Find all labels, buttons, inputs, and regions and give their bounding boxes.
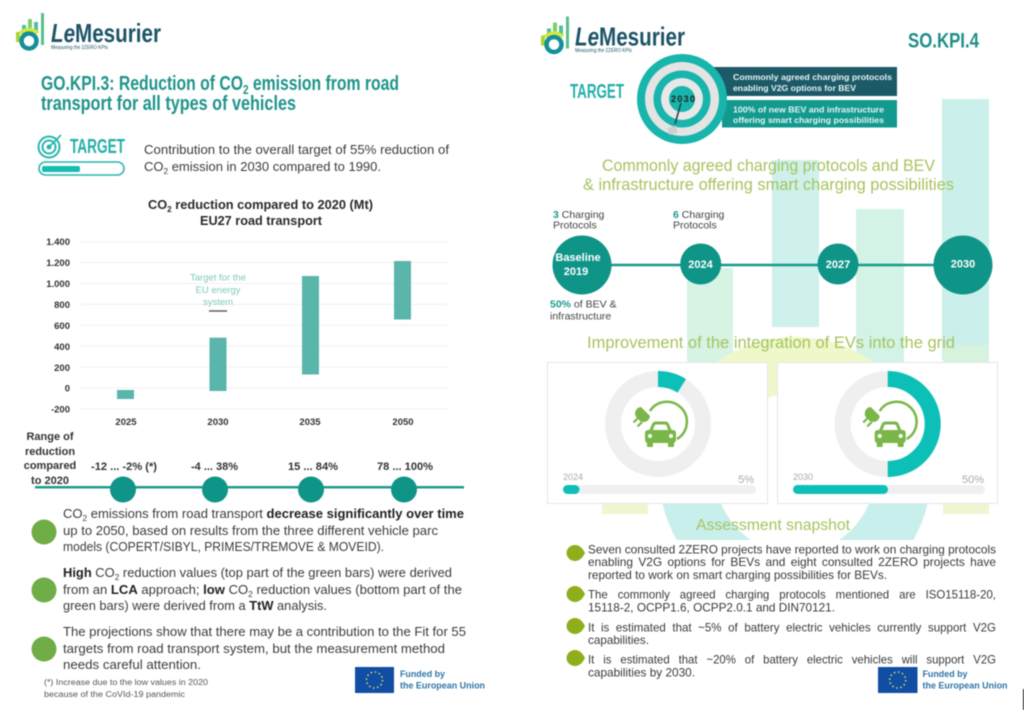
bullet: 5 percent V2G: [566, 618, 996, 647]
target description: CO: [144, 160, 163, 174]
timeline: 2024: [688, 259, 714, 271]
bullet: decrease over time: models (COPERT/SIBYL, PRIMES/TREMOVE & MOVEID).: [63, 540, 384, 554]
bullet: 5 percent V2G: It is estimated that ~5% of battery electric vehicles currently support V2G: [588, 620, 996, 634]
range of reduction timeline: -12 ... -2% (*): [91, 461, 157, 473]
milestone: 3 charging protocols: 3 Charging: [553, 209, 605, 221]
bullet: projections: [32, 625, 466, 672]
EU funding logo right: the European Union: [922, 680, 1008, 690]
heading: SO.KPI.4: SO.KPI.4: [908, 30, 979, 52]
timeline: 2027: [826, 259, 850, 271]
range of reduction timeline: [24, 431, 464, 502]
heading: charging protocols: Commonly agreed charging protocols and BEV: [602, 156, 936, 175]
range bar chart: 1.200: [46, 258, 70, 269]
footnote: because of the CoVId-19 pandemic: [44, 690, 185, 699]
footnote: (*) Increase due to the low values in 2020: [44, 678, 209, 687]
range bar chart: 1.400: [46, 237, 70, 248]
milestone: 6 charging protocols: Protocols: [673, 220, 717, 232]
target banners: 100% of new BEV and infrastructure: [733, 104, 884, 114]
icon: electric car: [863, 402, 917, 447]
bullet: protocols mentioned: The commonly agreed charging protocols mentioned are ISO15118-20,: [588, 588, 996, 602]
bullet: protocols mentioned: [566, 586, 996, 614]
target badge: [38, 135, 125, 175]
title: GO.KPI.3: Reduction of CO: [41, 72, 304, 95]
chart title: [148, 198, 373, 228]
range bar chart: 2025: [115, 417, 137, 428]
callout: EU energy system target: [190, 272, 246, 312]
range of reduction timeline: compared: [24, 460, 76, 472]
EU funding logo left: [355, 667, 485, 693]
heading: charging protocols: & infrastructure offering smart charging possibilities: [583, 175, 954, 194]
heading: integration of EVs: Improvement of the integration of EVs into the grid: [587, 334, 955, 352]
card: 2024 gauge: 5%: [738, 474, 754, 486]
EU funding logo left: Funded by: [400, 669, 445, 679]
heading: charging protocols: [583, 156, 954, 194]
bullet: protocols mentioned: 15118-2, OCPP1.6, OCPP2.0.1 and DIN70121.: [588, 600, 835, 614]
title: [41, 72, 399, 115]
EU funding logo right: Funded by: [922, 669, 968, 679]
bullet: consulted projects: [566, 542, 996, 582]
bullet: high and low values: green bars) were derived from a TtW analysis.: [63, 599, 327, 613]
target description: emission in 2030 compared to 1990.: [168, 160, 381, 174]
range of reduction timeline: 78 ... 100%: [377, 461, 433, 473]
card: 2030 gauge: [778, 362, 998, 504]
range bar chart: 200: [54, 363, 70, 374]
logo: LeMesurier left: Measuring the 2ZERO KPIs: [51, 45, 108, 51]
target description: [144, 143, 450, 176]
bullet: 5 percent V2G: capabilities.: [588, 633, 649, 647]
bullet: 20 percent V2G: capabilities by 2030.: [588, 666, 695, 680]
bullet: consulted projects: reported to work on smart charging possibilities for BEVs.: [588, 568, 887, 582]
icon: electric car: [634, 402, 687, 447]
bullet: high and low values: 2: [248, 590, 253, 599]
logo: LeMesurier right: LeMesurier: [575, 22, 685, 52]
range bar chart: 2050: [392, 417, 414, 428]
timeline: 2030: [951, 258, 975, 270]
milestone: 6 charging protocols: 6 Charging: [673, 209, 725, 221]
range bar chart: 1.000: [46, 279, 70, 290]
range of reduction timeline: to 2020: [31, 475, 69, 487]
bullet: decrease over time: CO: [63, 507, 82, 521]
bullet: consulted projects: enabling V2G options for BEVs and eight consulted 2ZERO projects have: [588, 555, 996, 569]
EU funding logo right: [878, 667, 1008, 693]
title: emission from road: [249, 72, 399, 95]
bullet: 20 percent V2G: [566, 650, 996, 680]
logo: LeMesurier right: [541, 16, 685, 54]
bullet: high and low values: High CO: [63, 566, 114, 580]
bullet: consulted projects: Seven consulted 2ZERO projects have reported to work on charging protocols: [588, 542, 996, 556]
milestone: 3 charging protocols: Protocols: [553, 220, 597, 232]
footnote: [44, 678, 209, 699]
bullet: decrease over time: 2: [83, 514, 88, 523]
milestone: 50 percent of BEV: infrastructure: [550, 310, 611, 322]
bullet: high and low values: [32, 566, 462, 613]
target banners: [712, 67, 897, 128]
target badge: TARGET: [70, 136, 125, 158]
milestone: 50 percent of BEV: 50% of BEV &: [550, 298, 617, 310]
logo: LeMesurier right: Measuring the 2ZERO KPIs: [575, 48, 632, 54]
range of reduction timeline: Range of: [26, 431, 74, 443]
target banners: offering smart charging possibilities: [733, 115, 884, 125]
heading: assessment snapshot: Assessment snapshot: [696, 517, 851, 534]
milestone: 50 percent of BEV: [550, 298, 617, 322]
logo: LeMesurier left: LeMesurier: [51, 18, 161, 48]
milestone: 3 charging protocols: [553, 209, 605, 232]
target description: Contribution to the overall target of 55% reduction of: [144, 143, 450, 157]
target banners: Commonly agreed charging protocols: [733, 72, 892, 82]
timeline: [550, 209, 992, 322]
range bar chart: 2035: [299, 417, 321, 428]
range bar chart: 0: [65, 384, 70, 394]
bullet: decrease over time: decrease significantly over time: [267, 507, 464, 521]
callout: EU energy system target: EU energy: [196, 285, 241, 296]
range of reduction timeline: reduction: [25, 446, 75, 458]
card: 2030 gauge: 50%: [962, 474, 984, 486]
milestone: 6 charging protocols: [673, 209, 725, 232]
chart title: reduction compared to 2020 (Mt): [172, 198, 373, 212]
bullet: decrease over time: emissions from road transport: [87, 507, 267, 521]
chart title: CO: [148, 198, 167, 212]
bullet: decrease over time: up to 2050, based on results from the three different vehicle parc: [63, 524, 438, 538]
right panel: SO.KPI.4: [541, 16, 1008, 693]
target icon 2030: [637, 54, 727, 144]
bullet: high and low values: reduction values (bottom part of the: [253, 583, 462, 597]
bullet: projections: The projections show that there may be a contribution to the Fit for 55: [63, 625, 466, 639]
target icon 2030: 2030: [671, 94, 695, 104]
logo: LeMesurier left: [16, 13, 161, 51]
range bar chart: 800: [54, 300, 70, 311]
range of reduction timeline: 15 ... 84%: [288, 461, 338, 473]
timeline: 2019: [564, 266, 588, 278]
target label: TARGET: [570, 81, 624, 103]
range bar chart: [46, 237, 448, 428]
card: 2030 gauge: 2030: [793, 472, 813, 482]
bullet: 20 percent V2G: It is estimated that ~20% of battery electric vehicles will support V2G: [588, 652, 996, 666]
target description: 2: [163, 167, 169, 176]
range bar chart: -200: [51, 404, 70, 416]
card: 2024 gauge: 2024: [563, 472, 583, 482]
target banners: enabling V2G options for BEV: [733, 83, 856, 93]
chart title: EU27 road transport: [200, 214, 323, 228]
callout: EU energy system target: system: [203, 297, 233, 308]
EU funding logo left: the European Union: [400, 680, 485, 690]
chart title: 2: [167, 205, 172, 214]
bullet: projections: targets from road transport system, but the measurement method: [63, 642, 445, 656]
title: transport for all types of vehicles: [41, 92, 296, 115]
range bar chart: 400: [54, 342, 70, 353]
bullet: high and low values: reduction values (top part of the green bars) were derived: [119, 566, 452, 580]
bullet: high and low values: 2: [115, 573, 120, 582]
bullet: projections: needs careful attention.: [63, 658, 201, 672]
timeline: Baseline: [555, 252, 601, 264]
bullet: high and low values: from an LCA approach; low CO: [63, 583, 247, 597]
left panel: GO.KPI.3: [16, 13, 485, 699]
card: 2024 gauge: [548, 362, 768, 504]
range bar chart: 2030: [207, 417, 229, 428]
title: 2: [243, 82, 249, 97]
range bar chart: 600: [54, 321, 70, 332]
background decoration: [602, 99, 989, 581]
callout: EU energy system target: Target for the: [190, 272, 246, 284]
bullet: decrease over time: [32, 507, 464, 554]
range of reduction timeline: -4 ... 38%: [191, 461, 238, 473]
